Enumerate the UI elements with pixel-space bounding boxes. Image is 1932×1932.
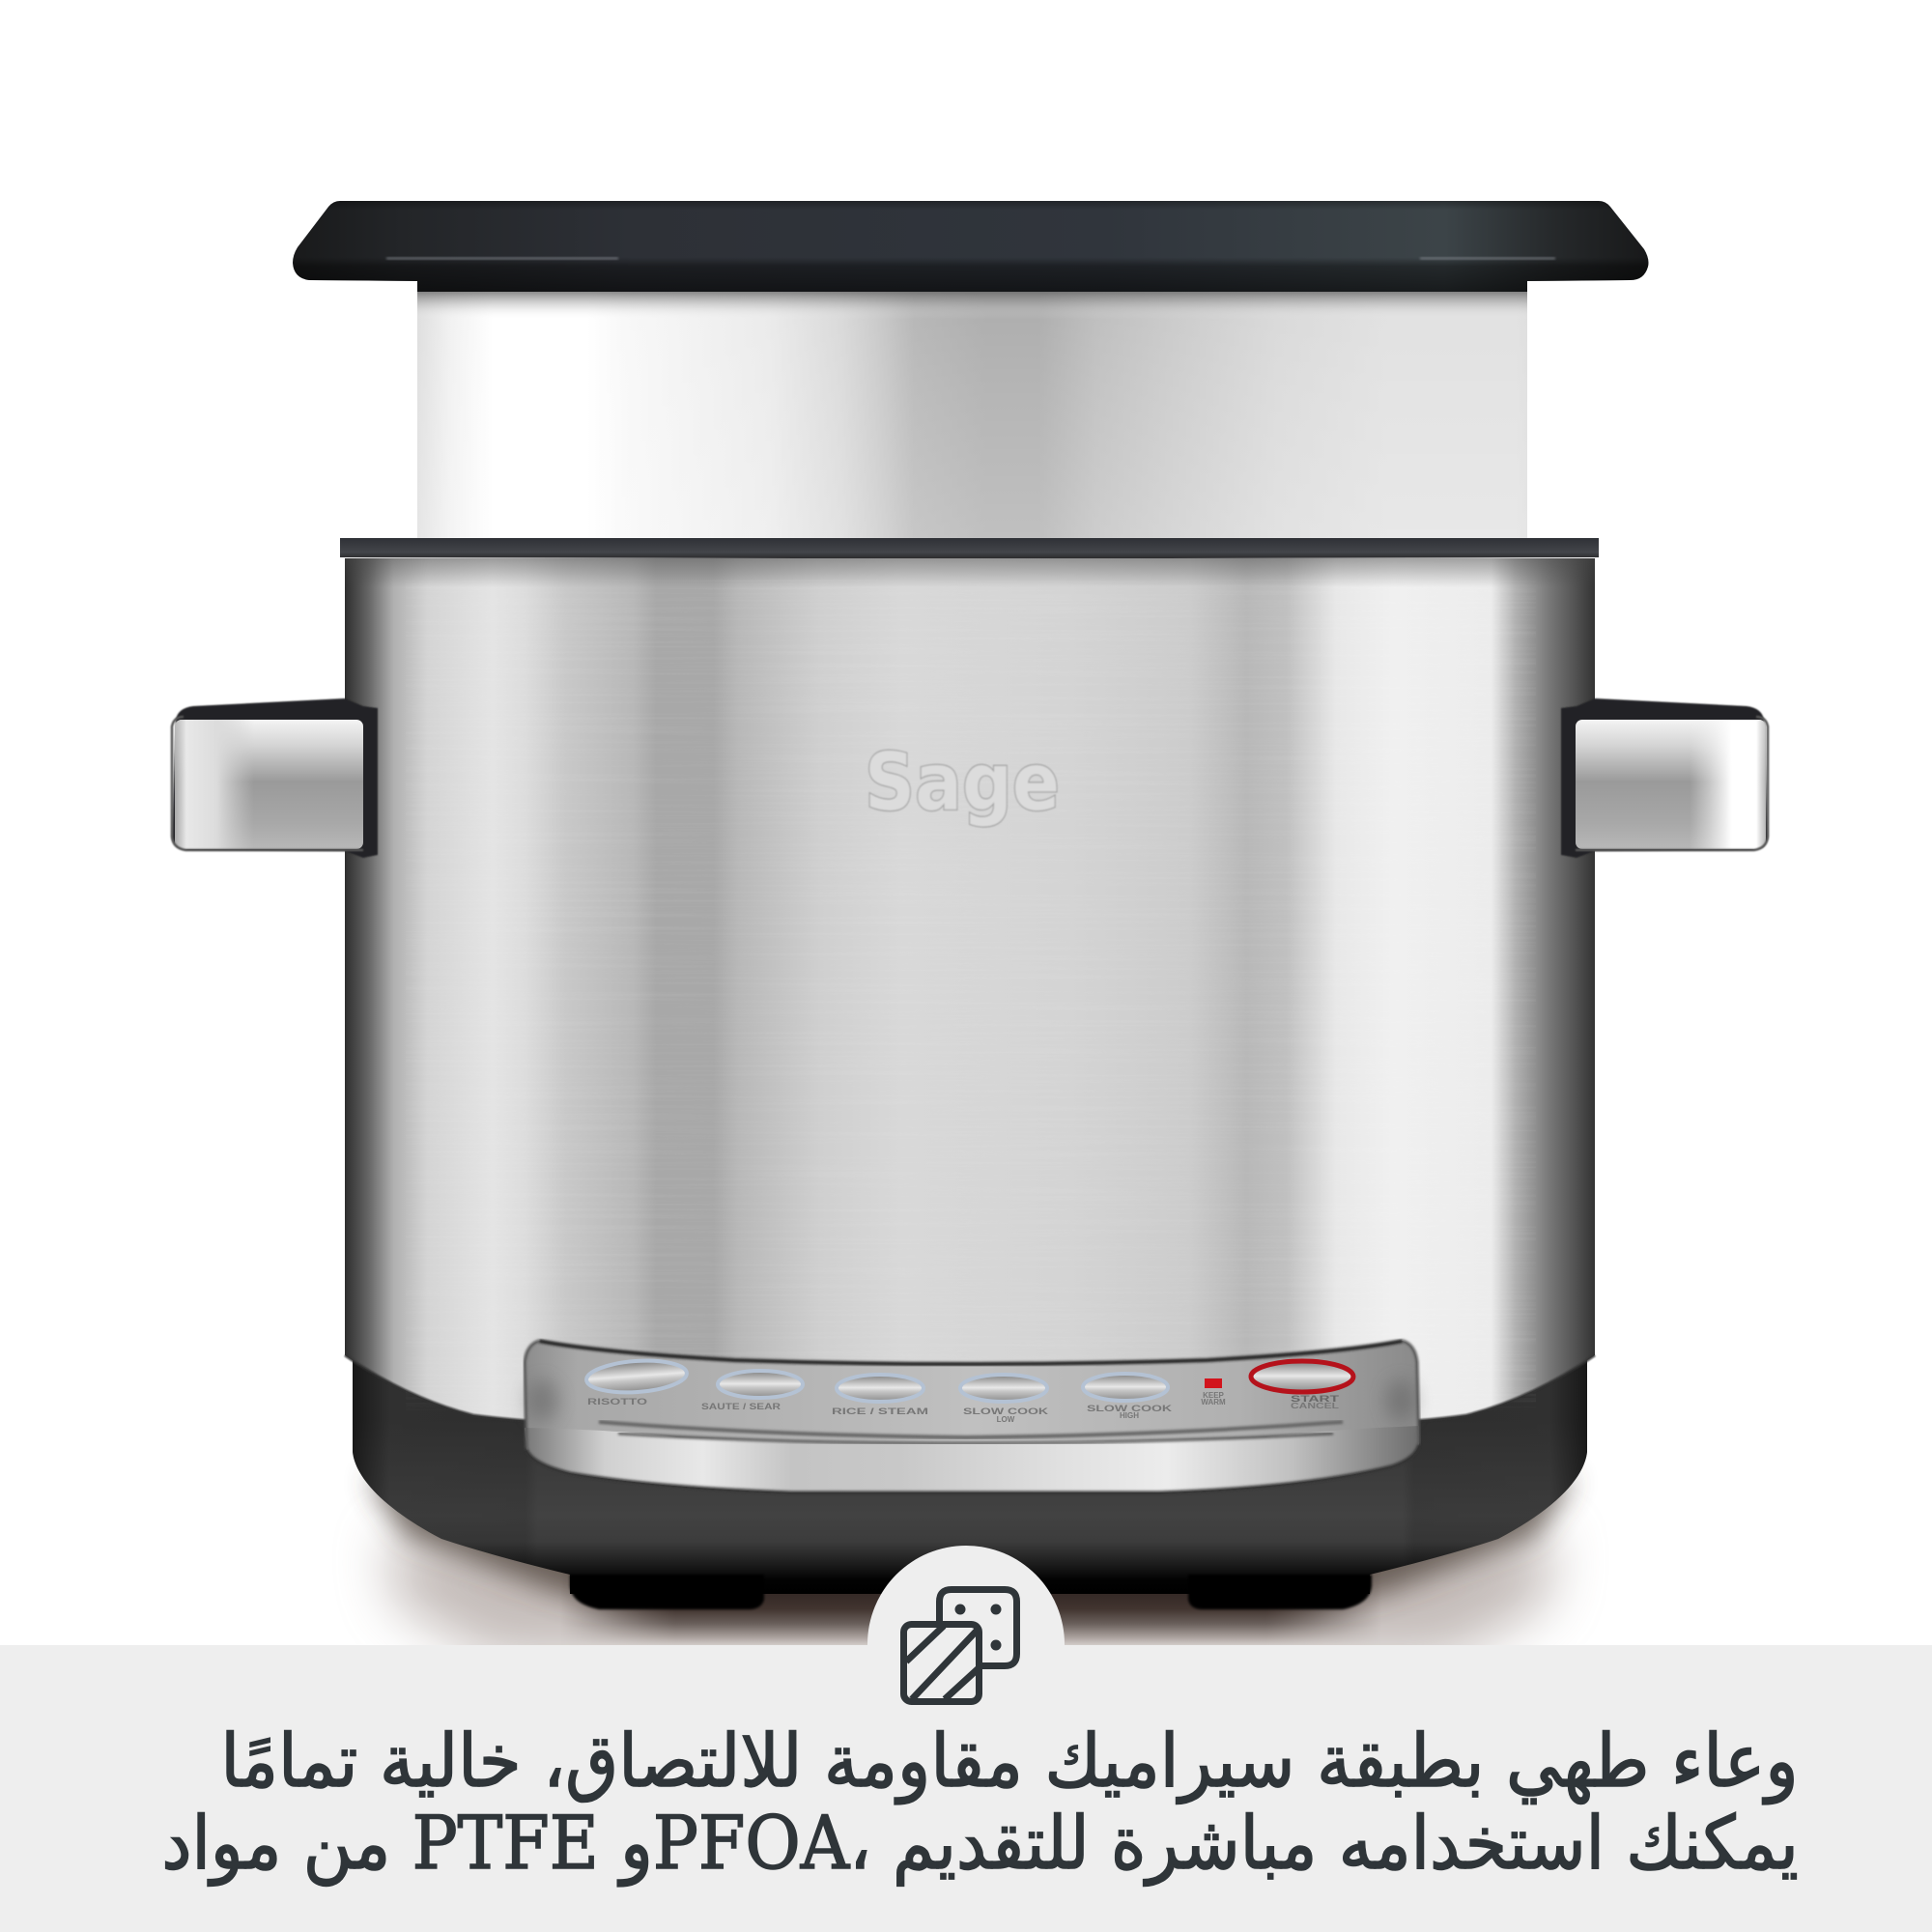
button 3 — [832, 1375, 928, 1416]
indicator light: KEEP — [1203, 1391, 1225, 1400]
chrome lip — [525, 1422, 1419, 1492]
caption text — [162, 1718, 1799, 1888]
right handle — [1561, 698, 1768, 858]
caption line 2: يمكنك استخدامه مباشرة للتقديم ،PFOAو PTFE من مواد — [162, 1800, 1799, 1886]
pressure cooker product — [172, 201, 1768, 1609]
button 4: LOW — [997, 1415, 1015, 1424]
indicator light — [1201, 1378, 1226, 1406]
start button: START — [1291, 1394, 1340, 1404]
dark base — [353, 1348, 1587, 1594]
icon: ceramic tiles — [904, 1590, 1016, 1702]
brand logo: Sage — [865, 737, 1060, 829]
feet — [570, 1575, 1372, 1609]
button 5 — [1083, 1374, 1173, 1420]
button 3: RICE / STEAM — [832, 1406, 928, 1416]
button 2 — [701, 1371, 803, 1411]
inner ceramic pot — [417, 286, 1527, 539]
left handle — [172, 698, 378, 858]
caption line 1: وعاء طهي بطبقة سيراميك مقاومة للالتصاق، خالية تمامًا — [221, 1718, 1799, 1804]
button 4: SLOW COOK — [963, 1406, 1049, 1416]
button 2: SAUTE / SEAR — [701, 1402, 781, 1411]
stainless steel body — [340, 538, 1599, 1424]
caption band — [0, 1645, 1932, 1932]
floor shadow — [367, 1478, 1575, 1657]
button 4 — [960, 1375, 1049, 1424]
button 5: SLOW COOK — [1087, 1404, 1173, 1413]
lid — [293, 201, 1648, 292]
indicator light: WARM — [1201, 1398, 1226, 1406]
button 5: HIGH — [1120, 1411, 1139, 1420]
button 1: RISOTTO — [587, 1397, 647, 1406]
start button — [1251, 1361, 1353, 1410]
start button: CANCEL — [1291, 1402, 1339, 1410]
control panel — [525, 1341, 1419, 1492]
button 1 — [585, 1357, 688, 1406]
icon badge — [867, 1546, 1065, 1743]
rim — [340, 538, 1599, 558]
